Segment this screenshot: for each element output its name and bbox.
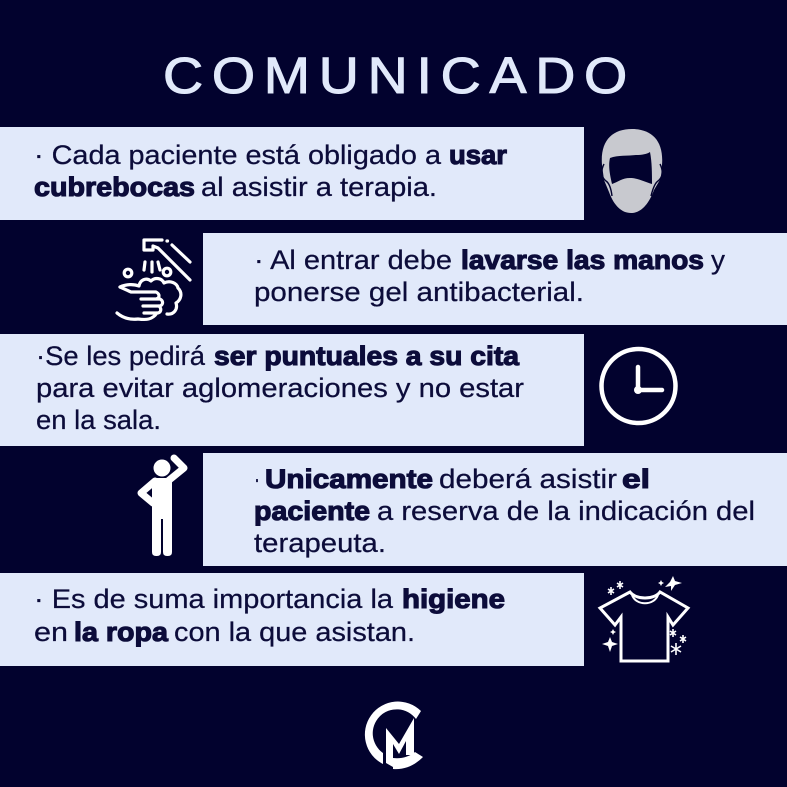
icon: clean shirt xyxy=(600,576,688,661)
panel: solo el paciente: el xyxy=(622,464,650,494)
title: COMUNICADO xyxy=(163,47,636,104)
panel: solo el paciente: Unicamente xyxy=(265,464,433,494)
panel: puntualidad xyxy=(0,334,584,446)
panel: lavado de manos: y xyxy=(711,245,726,275)
panel: higiene: la ropa xyxy=(74,617,169,647)
panel: puntualidad: para evitar aglomeraciones y no estar xyxy=(36,373,524,403)
panel: higiene xyxy=(0,573,584,666)
panel: cubrebocas: cubrebocas xyxy=(34,172,195,202)
panel: solo el paciente: paciente xyxy=(254,496,370,526)
panel: higiene: en xyxy=(34,617,68,647)
panel: cubrebocas: · Cada paciente está obligado a xyxy=(34,140,442,170)
panel: puntualidad: en la sala. xyxy=(36,405,161,435)
panel: cubrebocas: usar xyxy=(449,140,507,170)
panel: cubrebocas: al asistir a terapia. xyxy=(201,172,437,202)
panel: solo el paciente: deberá asistir xyxy=(439,464,617,494)
icon: face mask xyxy=(602,129,662,213)
icon: hand washing xyxy=(117,240,190,319)
panel: lavado de manos xyxy=(203,233,787,325)
icon: clock xyxy=(602,349,676,423)
panel: lavado de manos: · Al entrar debe xyxy=(254,245,452,275)
panel: solo el paciente: a reserva de la indicación del xyxy=(377,496,755,526)
panel: higiene: con la que asistan. xyxy=(174,617,415,647)
panel: lavado de manos: lavarse las manos xyxy=(461,245,704,275)
panel: solo el paciente: · xyxy=(254,464,260,494)
panel: cubrebocas xyxy=(0,127,584,220)
icon: person xyxy=(141,458,184,556)
panel: solo el paciente: terapeuta. xyxy=(254,528,386,558)
logo: CM xyxy=(365,702,423,769)
panel: lavado de manos: ponerse gel antibacterial. xyxy=(254,277,584,307)
panel: higiene: higiene xyxy=(402,584,505,614)
panel: higiene: · Es de suma importancia la xyxy=(34,584,394,614)
panel: puntualidad: ser puntuales a su cita xyxy=(214,341,520,371)
panel: puntualidad: ·Se les pedirá xyxy=(36,341,206,371)
panel: solo el paciente xyxy=(203,453,787,566)
